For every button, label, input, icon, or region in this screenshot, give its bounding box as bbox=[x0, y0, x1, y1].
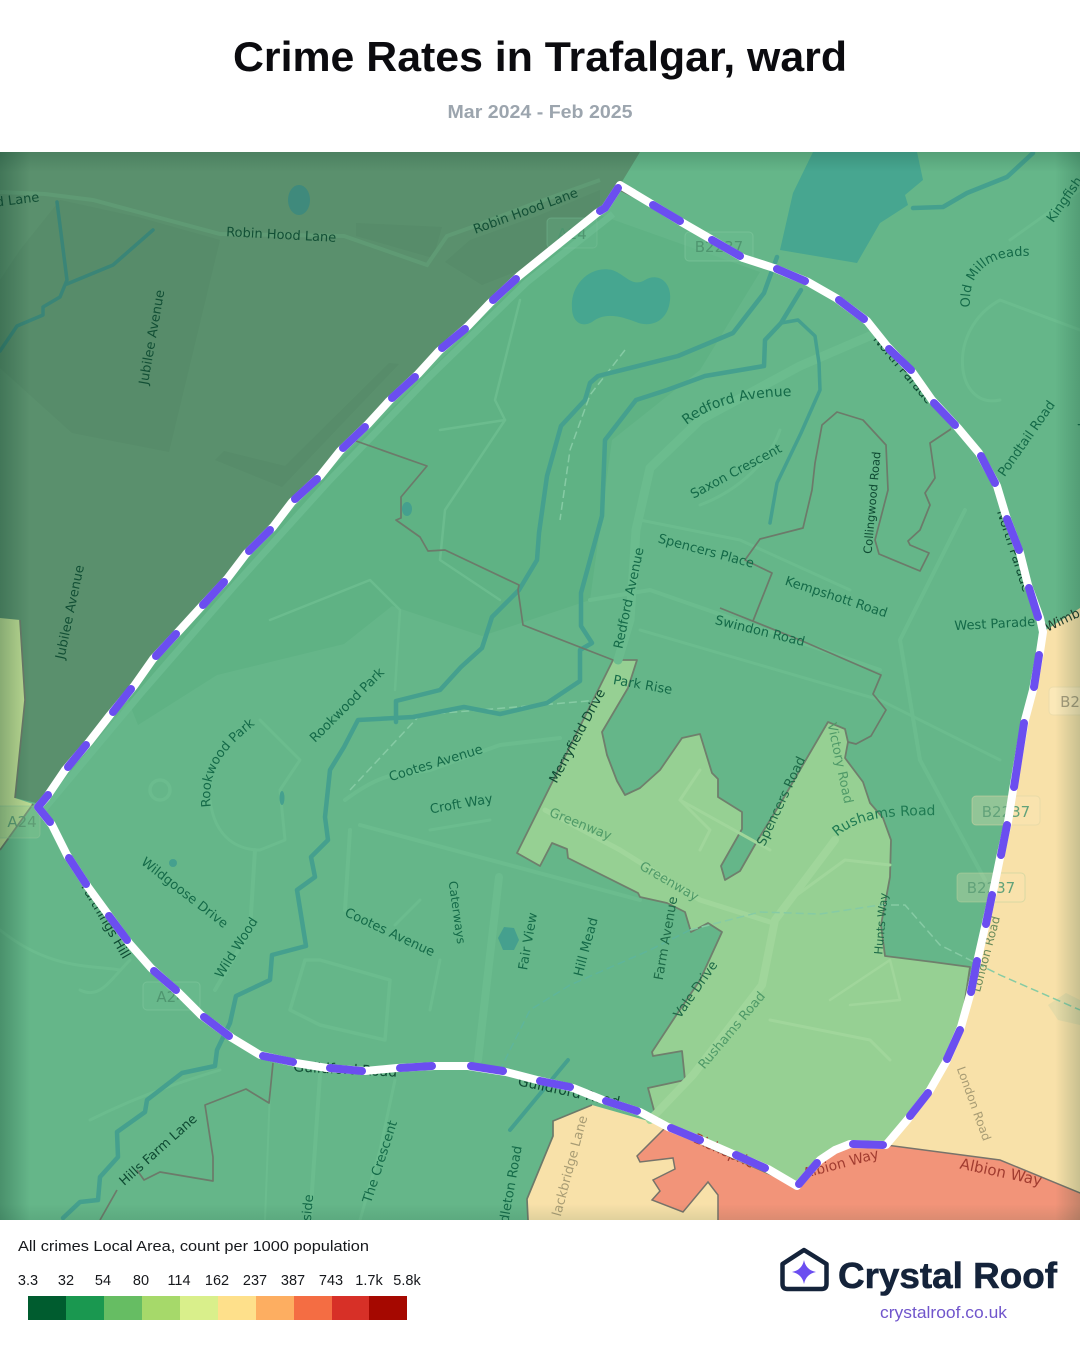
shield: B2237 north bbox=[685, 232, 753, 261]
labels ward north: Saxon Crescent bbox=[688, 442, 785, 502]
shield: B2237 east: B2237 bbox=[982, 803, 1030, 821]
labels north east: North Parade bbox=[870, 332, 936, 407]
labels light green area: Hunts Way bbox=[871, 892, 891, 955]
region: cream area bottom bbox=[528, 1105, 718, 1220]
dark area lane bbox=[0, 180, 600, 265]
labels south: side bbox=[300, 1194, 317, 1222]
labels light green area: Rushams Road bbox=[696, 989, 769, 1072]
labels light green area: Rushams Road bbox=[832, 804, 934, 836]
labels ward north bbox=[548, 377, 927, 783]
legend tick labels: 3.3 bbox=[18, 1273, 38, 1289]
legend tick labels: 54 bbox=[95, 1273, 111, 1289]
shield: A24 west bbox=[143, 982, 200, 1010]
ward boundary: white line bbox=[38, 185, 1043, 1186]
labels ward north: Redford Avenue bbox=[682, 388, 791, 424]
map panel bbox=[0, 152, 1080, 1220]
labels south: Guildford Road bbox=[293, 1059, 397, 1081]
pale footpaths bbox=[350, 350, 1080, 1070]
labels ward south west: Rookwood Park bbox=[307, 665, 388, 746]
legend tick labels bbox=[18, 1273, 421, 1289]
labels ward north: Collingwood Road bbox=[861, 451, 883, 554]
labels in dark area: Robin Hood Lane bbox=[471, 186, 580, 238]
labels north east: West Parade bbox=[954, 615, 1036, 634]
labels south: London Road bbox=[954, 1065, 994, 1143]
labels ward north: Redford Avenue bbox=[612, 546, 648, 650]
legend tick labels: 114 bbox=[167, 1273, 191, 1289]
vignette bbox=[0, 152, 1080, 1220]
labels in dark area: Jubilee Avenue bbox=[137, 289, 168, 387]
labels ward south west bbox=[105, 633, 598, 1022]
shield: B2 right edge: B2 bbox=[1060, 693, 1080, 711]
labels in dark area: Jubilee Avenue bbox=[53, 564, 88, 662]
title: Crime Rates in Trafalgar, ward bbox=[233, 33, 847, 80]
labels south: Bishopric bbox=[691, 1131, 756, 1172]
legend bbox=[18, 1239, 421, 1320]
labels light green area: Greenway bbox=[637, 859, 701, 905]
region: dark green area top left bbox=[0, 152, 640, 803]
legend tick labels: 5.8k bbox=[393, 1273, 421, 1289]
region: cream area right bbox=[886, 608, 1080, 1195]
labels south: London Road bbox=[969, 915, 1003, 993]
labels south: dleton Road bbox=[497, 1145, 526, 1224]
labels light green area: Vale Drive bbox=[671, 959, 721, 1021]
labels north east: Pondtail Road bbox=[996, 398, 1059, 480]
shield: A24 west: A24 bbox=[156, 988, 186, 1006]
labels ward north: Swindon Road bbox=[713, 613, 806, 650]
labels south: Hills Farm Lane bbox=[117, 1112, 201, 1189]
water: large lake top right bbox=[780, 152, 923, 263]
website: crystalroof.co.uk bbox=[880, 1304, 1008, 1322]
labels light green area: Spencers Road bbox=[755, 755, 809, 849]
labels light green area: Farm Avenue bbox=[652, 895, 681, 981]
labels ward north: Merryfield Drive bbox=[547, 687, 609, 786]
internal area boundaries bbox=[0, 190, 951, 1220]
labels south: Guildford Road bbox=[516, 1073, 621, 1111]
roads in light green area bbox=[545, 770, 900, 1120]
legend colour scale bbox=[28, 1296, 407, 1320]
road strip beside the north west boundary bbox=[129, 216, 612, 709]
labels in dark area: Robin Hood Lane bbox=[226, 225, 337, 246]
labels ward north: Spencers Place bbox=[656, 532, 756, 572]
map base: green area bbox=[0, 152, 1080, 1220]
labels ward south west: Wildgoose Drive bbox=[138, 855, 230, 932]
legend tick labels: 80 bbox=[133, 1273, 149, 1289]
dark area field tones bbox=[0, 190, 600, 487]
labels light green area bbox=[550, 722, 934, 1069]
labels ward north: Park Rise bbox=[612, 673, 673, 698]
labels light green area: Victory Road bbox=[824, 722, 855, 805]
labels ward south west: Cootes Avenue bbox=[342, 905, 437, 960]
region: light yellow green at left edge bbox=[0, 618, 33, 850]
ward boundary outline bbox=[38, 185, 1043, 1186]
shield: B2237 east lower: B2237 bbox=[967, 879, 1015, 897]
shield: B2237 north: B2237 bbox=[695, 238, 743, 256]
legend tick labels: 32 bbox=[58, 1273, 74, 1289]
legend tick labels: 743 bbox=[319, 1273, 343, 1289]
water: rivers in dark area bbox=[0, 202, 153, 351]
water: pond bbox=[572, 269, 670, 324]
labels south: Farthings Hill bbox=[77, 881, 133, 962]
legend tick labels: 1.7k bbox=[355, 1273, 383, 1289]
labels south: Albion Way bbox=[801, 1146, 881, 1182]
ward woodland shade bbox=[125, 215, 760, 725]
logo wordmark: Crystal Roof bbox=[838, 1255, 1058, 1296]
shield: A24 south: A24 bbox=[7, 813, 37, 831]
labels ward south west: Croft Way bbox=[429, 792, 494, 817]
logo bbox=[782, 1250, 1058, 1322]
legend tick labels: 387 bbox=[281, 1273, 305, 1289]
legend tick labels: 237 bbox=[243, 1273, 267, 1289]
shield: A24 north: A24 bbox=[557, 225, 587, 243]
subtitle: date range: Mar 2024 - Feb 2025 bbox=[448, 101, 632, 122]
labels ward south west: Caterways bbox=[446, 880, 468, 945]
icon: house with star bbox=[782, 1250, 826, 1289]
labels north east: North Parade bbox=[993, 508, 1034, 594]
shield: B2 right edge bbox=[1049, 687, 1080, 715]
cream patch bbox=[1048, 993, 1080, 1025]
shield: B2237 east bbox=[972, 796, 1040, 825]
labels ward north: Kempshott Road bbox=[783, 574, 889, 621]
labels south bbox=[77, 881, 1044, 1224]
region: light green south east of ward bbox=[517, 660, 970, 1186]
labels south: Albion Way bbox=[958, 1155, 1044, 1190]
labels ward south west: Rookwood Park bbox=[201, 719, 255, 806]
labels ward south west: Hill Mead bbox=[572, 916, 602, 978]
labels south: The Crescent bbox=[360, 1119, 401, 1206]
labels south: lackbridge Lane bbox=[550, 1114, 591, 1218]
labels north east bbox=[874, 178, 1080, 631]
shield: A24 south bbox=[0, 806, 40, 838]
shield: A24 north bbox=[547, 218, 597, 248]
water: rivers bbox=[63, 153, 1033, 1218]
labels ward south west: Cootes Avenue bbox=[387, 742, 485, 785]
labels in dark area bbox=[0, 186, 580, 662]
legend title: All crimes Local Area, count per 1000 population bbox=[18, 1239, 369, 1255]
road shields bbox=[0, 218, 1080, 1010]
water: small ponds in ward bbox=[169, 502, 519, 950]
labels north east: Old Millmeads bbox=[960, 246, 1029, 307]
labels ward south west: Fair View bbox=[516, 911, 541, 971]
water: small pond in dark area bbox=[288, 185, 310, 215]
labels ward south west: Wild Wood bbox=[213, 915, 262, 981]
ward boundary: purple dashes bbox=[38, 188, 1039, 1184]
region: salmon area bottom right bbox=[637, 1128, 1080, 1225]
roads in green area bbox=[269, 299, 641, 898]
legend tick labels: 162 bbox=[205, 1273, 229, 1289]
shield: B2237 east lower bbox=[957, 873, 1025, 902]
labels light green area: Greenway bbox=[547, 806, 614, 844]
